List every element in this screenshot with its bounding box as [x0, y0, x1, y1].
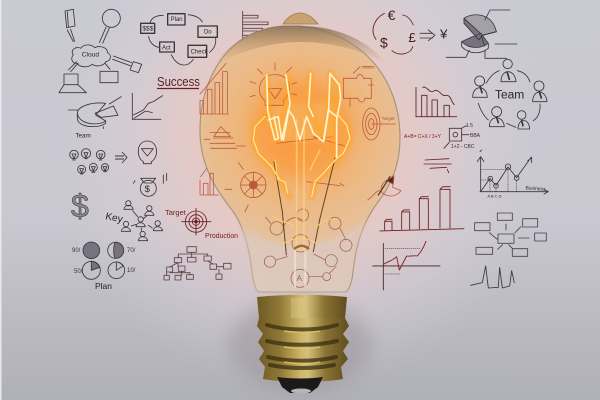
doodles seen through glass	[200, 63, 401, 287]
doodle: plan do check act cycle: Plan	[171, 17, 183, 23]
doodle: money bag: $	[145, 184, 151, 194]
screw threads	[257, 318, 349, 382]
doodle: bulb, puzzle and target in glass: Solution	[361, 65, 375, 69]
doodle: circles in neck: A	[297, 274, 303, 283]
label text: 1+2 - CBC	[451, 144, 475, 150]
formula: A+B= C+X / 3+Y	[404, 134, 442, 140]
doodle: plan do check act cycle: Do	[204, 29, 212, 35]
pie labels	[72, 248, 136, 275]
neck pale area	[238, 220, 368, 292]
doodle: plan pies	[82, 242, 125, 279]
label text: BBA	[470, 133, 481, 139]
doodles: left column	[59, 9, 268, 291]
doodle: people network	[121, 201, 163, 241]
outer loops	[253, 113, 350, 197]
text: Production: Production	[205, 231, 238, 240]
doodle: rising bars	[380, 187, 464, 231]
doodle: money bag	[133, 173, 167, 196]
heading: Success: Success	[157, 75, 200, 89]
glass shading	[273, 103, 335, 141]
hot coils	[267, 73, 341, 158]
doodle: circles in neck	[264, 209, 352, 287]
doodle: currency cycle: $	[380, 34, 388, 50]
bulb glass	[200, 13, 400, 292]
pie labels: 50/	[74, 269, 83, 275]
doodle: line chart	[132, 93, 163, 119]
text: Plan: Plan	[95, 281, 112, 291]
light bulb	[200, 13, 401, 292]
label text: 1.5	[466, 123, 473, 129]
filament glow	[253, 73, 350, 197]
text: Target: Target	[165, 208, 187, 217]
doodle: plan do check act cycle: $$$	[142, 26, 154, 33]
doodle: team cycle: Team	[495, 87, 524, 101]
top dark band	[214, 26, 386, 66]
doodle: horizontal bars	[243, 11, 268, 42]
doodle: cloud network: Cloud	[82, 52, 99, 59]
pie labels: 10/	[127, 268, 136, 274]
collar	[257, 295, 347, 320]
doodle: org chart	[164, 247, 231, 280]
doodle: square with labels	[444, 126, 469, 148]
doodle: business line chart: A B C D	[487, 194, 502, 199]
pie labels: 90/	[72, 248, 81, 254]
doodle: plan do check act cycle	[141, 14, 217, 65]
doodle: currency cycle: £	[408, 30, 416, 45]
doodle: currency cycle: €	[388, 7, 396, 23]
doodle: plan do check act cycle: Act	[162, 45, 171, 51]
pale stem and wire supports	[295, 250, 305, 287]
doodle: target	[182, 208, 211, 235]
label text	[451, 123, 481, 150]
doodle: box diagram	[475, 213, 546, 256]
brass screw base	[257, 295, 349, 394]
doodles: right column	[373, 7, 548, 290]
doodle: stock chart	[373, 241, 440, 290]
inner glow	[252, 78, 352, 178]
doodle: business line chart: Business	[525, 185, 546, 193]
doodle: bulb, puzzle and target in glass: Target	[382, 116, 395, 121]
doodle: funnel bulb	[138, 141, 157, 164]
doodle: currency cycle	[373, 7, 448, 54]
doodle: bulb, puzzle and target in glass	[250, 63, 395, 140]
doodle: exploded pie chart	[446, 10, 517, 58]
doodle: idea bulbs	[70, 149, 109, 174]
formula lines	[424, 159, 451, 173]
doodle: heartbeat	[471, 266, 514, 288]
doodle: plan do check act cycle: Check	[191, 49, 208, 55]
arrow	[115, 152, 127, 163]
text: Key: Key	[104, 211, 124, 226]
doodle: falling bar chart	[416, 87, 457, 117]
doodle: team pie chart	[68, 97, 121, 139]
filament	[253, 73, 350, 287]
doodle: currency cycle: ¥	[439, 26, 448, 41]
black tip	[277, 377, 323, 393]
doodle: cloud network	[59, 9, 142, 93]
doodle: red bars in glass	[200, 63, 245, 195]
doodle: business line chart	[477, 150, 548, 199]
doodle: wheel and pie in glass	[225, 137, 401, 212]
pie labels: 70/	[127, 248, 136, 254]
doodle: team cycle	[473, 59, 547, 129]
doodle: dollar sign: $	[71, 188, 89, 224]
doodle: team pie chart: Team	[75, 132, 91, 139]
